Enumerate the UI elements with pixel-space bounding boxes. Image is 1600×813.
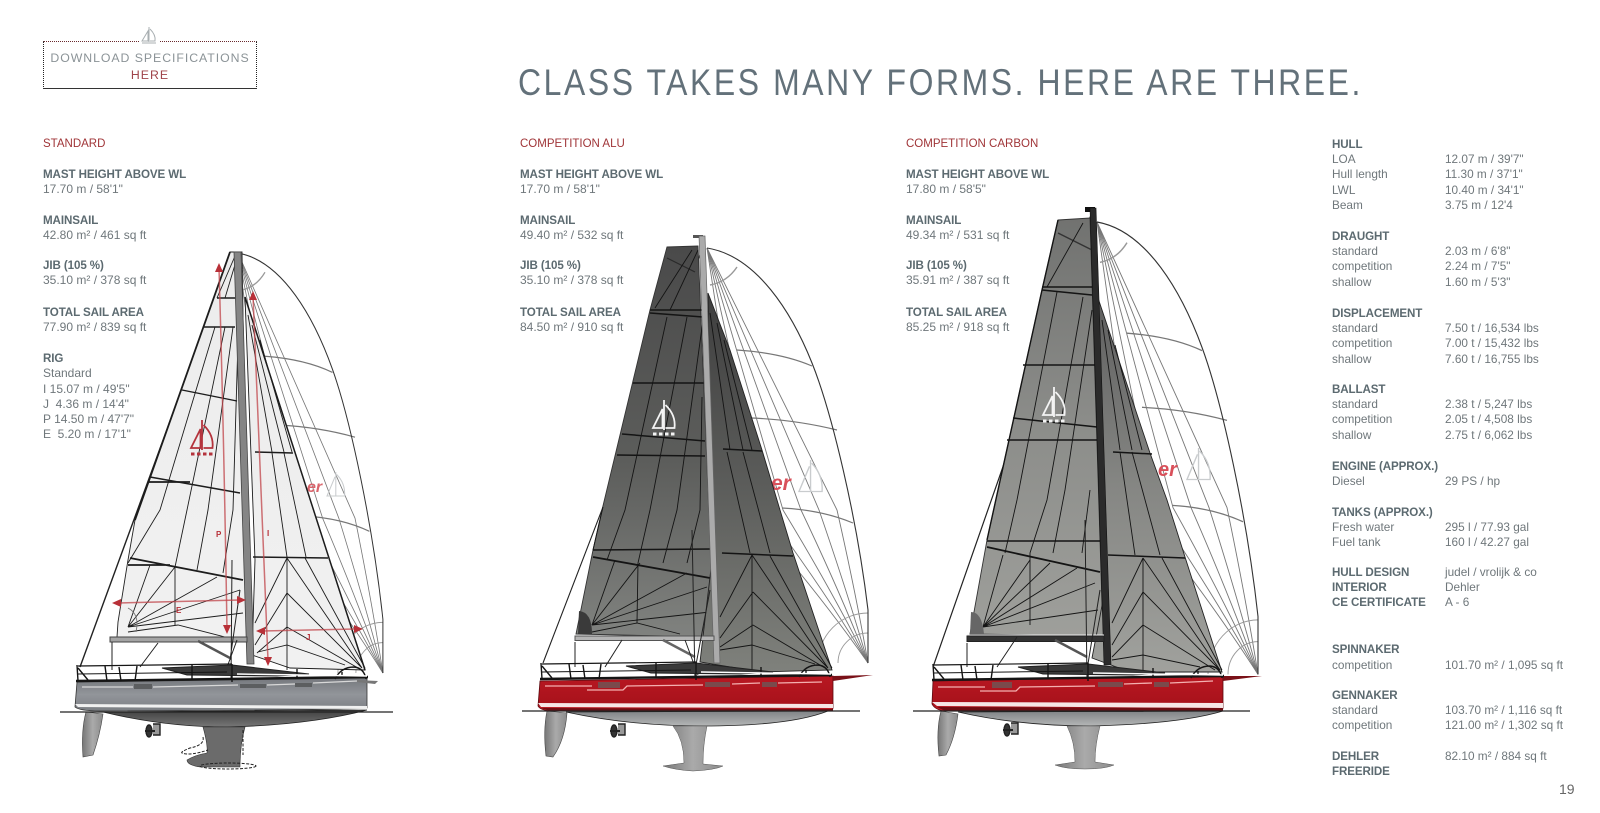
draught bbox=[1332, 230, 1510, 289]
gennaker logo: er bbox=[771, 472, 793, 495]
rudder bbox=[545, 711, 567, 757]
jib: 35.91 m² / 387 sq ft bbox=[906, 273, 1009, 287]
gennaker: competition bbox=[1332, 718, 1392, 732]
draught: standard bbox=[1332, 244, 1378, 258]
hull bbox=[1332, 138, 1524, 212]
mainsail bbox=[906, 214, 1010, 242]
tanks: Fresh water bbox=[1332, 520, 1394, 534]
boom and rigging bbox=[967, 520, 1104, 680]
rig: J 4.36 m / 14'4" bbox=[43, 397, 129, 411]
jib bbox=[520, 259, 624, 287]
icon: sail bbox=[140, 27, 159, 44]
gennaker bbox=[1332, 688, 1563, 732]
tanks: Fuel tank bbox=[1332, 535, 1381, 549]
mainsail bbox=[117, 252, 248, 637]
displacement: standard bbox=[1332, 321, 1378, 335]
keel bbox=[663, 726, 723, 771]
boom and rigging bbox=[575, 530, 714, 680]
mainsail bbox=[43, 214, 146, 242]
jib bbox=[43, 259, 146, 287]
gennaker: GENNAKER bbox=[1332, 688, 1398, 702]
mainsail bbox=[520, 214, 624, 242]
mast height: 17.70 m / 58'1" bbox=[520, 182, 600, 196]
underbody bbox=[958, 711, 1223, 726]
rig dimension arrows: J bbox=[306, 633, 310, 642]
hull bbox=[538, 675, 873, 711]
gennaker logo: er bbox=[1158, 459, 1178, 481]
deck and railing bbox=[540, 662, 832, 680]
rig dimension arrows: E bbox=[176, 606, 182, 615]
mainsail bbox=[576, 246, 714, 637]
spinnaker: competition bbox=[1332, 658, 1392, 672]
waterline bbox=[913, 710, 1250, 712]
mast bbox=[234, 252, 254, 664]
draught: DRAUGHT bbox=[1332, 230, 1389, 242]
mainsail: 42.80 m² / 461 sq ft bbox=[43, 228, 146, 242]
panel: technical data: 3.75 m / 12'4 bbox=[1445, 198, 1513, 212]
panel: technical data: 11.30 m / 37'1" bbox=[1445, 167, 1523, 181]
panel: competition carbon specs bbox=[906, 138, 1049, 334]
total sail area: 84.50 m² / 910 sq ft bbox=[520, 320, 623, 334]
displacement: DISPLACEMENT bbox=[1332, 306, 1422, 320]
underbody bbox=[103, 710, 367, 727]
tanks: TANKS (APPROX.) bbox=[1332, 506, 1433, 518]
panel: technical data: 2.75 t / 6,062 lbs bbox=[1445, 428, 1532, 442]
page number: 19 bbox=[1559, 781, 1575, 797]
gennaker logo bbox=[307, 472, 345, 496]
keel bbox=[1055, 726, 1114, 769]
gennaker logo bbox=[771, 460, 822, 495]
rig dimension arrows bbox=[112, 263, 363, 666]
dehler freeride bbox=[1332, 749, 1547, 778]
gennaker sail bbox=[1097, 222, 1258, 674]
rig: E 5.20 m / 17'1" bbox=[43, 427, 131, 441]
deck and railing bbox=[932, 663, 1224, 681]
rig: I 15.07 m / 49'5" bbox=[43, 382, 130, 396]
total sail area bbox=[520, 306, 624, 334]
panel: technical data: 1.60 m / 5'3" bbox=[1445, 275, 1510, 289]
total sail area: TOTAL SAIL AREA bbox=[520, 306, 621, 319]
boom and rigging bbox=[110, 560, 247, 682]
mast height: 17.80 m / 58'5" bbox=[906, 182, 986, 196]
mainsail: 49.40 m² / 532 sq ft bbox=[520, 228, 623, 242]
rig bbox=[43, 352, 134, 441]
jib bbox=[700, 293, 832, 672]
tanks bbox=[1332, 506, 1529, 549]
propeller bbox=[1003, 723, 1018, 736]
ballast bbox=[1332, 382, 1532, 442]
panel: technical data: 7.00 t / 15,432 lbs bbox=[1445, 336, 1539, 350]
panel: technical data: 12.07 m / 39'7" bbox=[1445, 152, 1524, 166]
mast height: 17.70 m / 58'1" bbox=[43, 182, 123, 196]
ballast: BALLAST bbox=[1332, 382, 1385, 396]
dehler freeride: DEHLER bbox=[1332, 750, 1379, 763]
propeller bbox=[145, 724, 160, 737]
mast height: MAST HEIGHT ABOVE WL bbox=[520, 168, 663, 181]
waterline bbox=[60, 711, 393, 713]
spinnaker: SPINNAKER bbox=[1332, 642, 1399, 656]
button text: HERE bbox=[131, 68, 169, 82]
gennaker logo: er bbox=[307, 479, 323, 496]
button text: DOWNLOAD SPECIFICATIONS bbox=[50, 51, 250, 65]
panel: technical data: Dehler bbox=[1445, 580, 1480, 594]
jib: JIB (105 %) bbox=[520, 259, 581, 272]
total sail area: 85.25 m² / 918 sq ft bbox=[906, 320, 1009, 334]
hull bbox=[75, 678, 378, 711]
heading: standard: STANDARD bbox=[43, 138, 105, 150]
mainsail logo bbox=[191, 420, 213, 454]
rudder bbox=[82, 712, 103, 757]
mainsail logo bbox=[653, 400, 675, 434]
displacement bbox=[1332, 306, 1539, 366]
panel: technical data bbox=[1332, 138, 1563, 778]
draught: shallow bbox=[1332, 275, 1371, 289]
rig: Standard bbox=[43, 366, 92, 380]
panel: technical data: 82.10 m² / 884 sq ft bbox=[1445, 749, 1547, 763]
mainsail: MAINSAIL bbox=[906, 214, 961, 226]
design and certificate: CE CERTIFICATE bbox=[1332, 596, 1426, 609]
panel: technical data: 7.60 t / 16,755 lbs bbox=[1445, 352, 1539, 366]
heading: competition alu: COMPETITION ALU bbox=[520, 138, 625, 150]
jib: JIB (105 %) bbox=[43, 259, 104, 272]
panel: technical data: A - 6 bbox=[1445, 595, 1469, 609]
propeller bbox=[610, 724, 625, 737]
gennaker sail bbox=[707, 248, 868, 663]
waterline bbox=[522, 710, 860, 712]
total sail area bbox=[43, 306, 146, 334]
backstay bbox=[80, 252, 232, 667]
rig dimension arrows: P bbox=[216, 530, 222, 539]
panel: technical data: 7.50 t / 16,534 lbs bbox=[1445, 321, 1539, 335]
panel: technical data: 2.24 m / 7'5" bbox=[1445, 259, 1510, 273]
dehler freeride: FREERIDE bbox=[1332, 765, 1390, 778]
gennaker logo bbox=[1158, 448, 1210, 481]
mast bbox=[693, 235, 720, 663]
hull: Beam bbox=[1332, 198, 1363, 212]
engine: ENGINE (APPROX.) bbox=[1332, 460, 1438, 472]
mast height bbox=[520, 168, 663, 196]
deck and railing bbox=[76, 664, 368, 682]
displacement: shallow bbox=[1332, 352, 1371, 366]
gennaker sail bbox=[238, 253, 383, 673]
panel: competition alu specs bbox=[520, 138, 663, 334]
button text bbox=[50, 51, 250, 82]
panel: technical data: 160 l / 42.27 gal bbox=[1445, 535, 1529, 549]
mast height: MAST HEIGHT ABOVE WL bbox=[43, 168, 186, 181]
mainsail: MAINSAIL bbox=[520, 214, 575, 226]
gennaker: standard bbox=[1332, 703, 1378, 717]
heading: competition carbon: COMPETITION CARBON bbox=[906, 138, 1038, 150]
design and certificate: HULL DESIGN bbox=[1332, 566, 1409, 578]
panel: technical data: 2.03 m / 6'8" bbox=[1445, 244, 1510, 258]
mast bbox=[1085, 207, 1111, 665]
jib: 35.10 m² / 378 sq ft bbox=[43, 273, 146, 287]
displacement: competition bbox=[1332, 336, 1392, 350]
hull: LWL bbox=[1332, 183, 1355, 197]
total sail area: 77.90 m² / 839 sq ft bbox=[43, 320, 146, 334]
panel: technical data: 2.38 t / 5,247 lbs bbox=[1445, 397, 1532, 411]
jib: JIB (105 %) bbox=[906, 259, 967, 272]
design and certificate: INTERIOR bbox=[1332, 581, 1387, 594]
ballast: standard bbox=[1332, 397, 1378, 411]
mainsail logo bbox=[1043, 387, 1065, 421]
boat: standard bbox=[60, 252, 393, 769]
backstay bbox=[543, 247, 703, 663]
mast height bbox=[43, 168, 186, 196]
boat: competition carbon bbox=[913, 207, 1262, 769]
panel: technical data: 101.70 m² / 1,095 sq ft bbox=[1445, 658, 1563, 672]
rudder bbox=[938, 711, 958, 756]
panel: standard specs bbox=[43, 138, 186, 441]
ballast: shallow bbox=[1332, 428, 1371, 442]
draught: competition bbox=[1332, 259, 1392, 273]
jib: 35.10 m² / 378 sq ft bbox=[520, 273, 623, 287]
panel: technical data: 10.40 m / 34'1" bbox=[1445, 183, 1524, 197]
design and certificate bbox=[1332, 564, 1537, 609]
rig dimension arrows: I bbox=[267, 529, 269, 538]
jib bbox=[245, 297, 365, 670]
mainsail: 49.34 m² / 531 sq ft bbox=[906, 228, 1009, 242]
hull: Hull length bbox=[1332, 167, 1388, 181]
total sail area: TOTAL SAIL AREA bbox=[43, 306, 144, 319]
boat: competition alu bbox=[522, 235, 873, 771]
hull bbox=[932, 676, 1262, 711]
mainsail bbox=[970, 218, 1103, 636]
panel: technical data: 29 PS / hp bbox=[1445, 474, 1500, 488]
rig: P 14.50 m / 47'7" bbox=[43, 412, 134, 426]
panel: technical data: 121.00 m² / 1,302 sq ft bbox=[1445, 718, 1563, 732]
panel: technical data: 2.05 t / 4,508 lbs bbox=[1445, 412, 1532, 426]
panel: technical data: 295 l / 77.93 gal bbox=[1445, 520, 1529, 534]
panel: technical data: judel / vrolijk & co bbox=[1445, 564, 1537, 578]
keel bbox=[182, 727, 256, 769]
panel: technical data: 103.70 m² / 1,116 sq ft bbox=[1445, 703, 1562, 717]
download box bbox=[43, 27, 257, 89]
box outline bbox=[43, 41, 257, 89]
total sail area bbox=[906, 306, 1010, 334]
hull: LOA bbox=[1332, 152, 1356, 166]
backstay bbox=[933, 212, 1092, 667]
hull: HULL bbox=[1332, 138, 1363, 150]
spinnaker bbox=[1332, 642, 1563, 672]
engine bbox=[1332, 460, 1500, 488]
mast height bbox=[906, 168, 1049, 196]
mainsail: MAINSAIL bbox=[43, 214, 98, 226]
underbody bbox=[566, 711, 828, 726]
rig: RIG bbox=[43, 352, 63, 365]
total sail area: TOTAL SAIL AREA bbox=[906, 306, 1007, 319]
mast height: MAST HEIGHT ABOVE WL bbox=[906, 168, 1049, 181]
engine: Diesel bbox=[1332, 474, 1365, 488]
jib bbox=[906, 259, 1010, 287]
ballast: competition bbox=[1332, 412, 1392, 426]
jib bbox=[1092, 298, 1222, 672]
